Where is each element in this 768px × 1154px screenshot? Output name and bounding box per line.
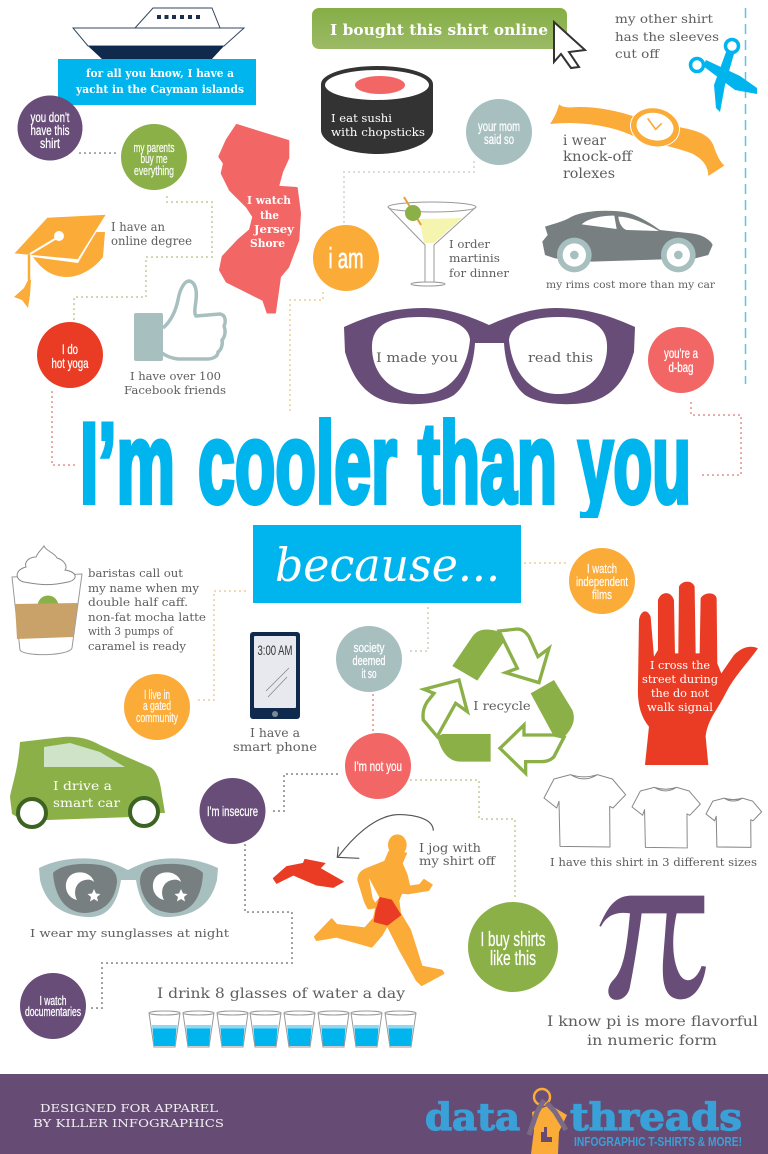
callout: yacht: yacht in the Cayman islands	[75, 82, 244, 96]
circle: i am: i am	[328, 243, 364, 275]
circle: I watch documentaries	[20, 973, 86, 1039]
icon: smart phone	[250, 632, 300, 719]
circle: I watch independent films: I watch	[587, 561, 617, 576]
icon: scissors	[690, 40, 757, 112]
text: Facebook friends: Facebook friends	[124, 383, 226, 397]
text: jog with shirt off: I jog with	[419, 840, 481, 855]
text: baristas: with 3 pumps of	[88, 624, 174, 638]
circle: I buy shirts like this	[468, 902, 558, 992]
text: sleeves cut off: has the sleeves	[615, 29, 719, 44]
text: baristas: non-fat mocha latte	[88, 610, 206, 624]
icon: sunglasses at night	[39, 858, 218, 917]
circle: my parents buy me everything: everything	[134, 164, 174, 178]
circle: society deemed it so: it so	[362, 666, 376, 681]
text: three sizes: I have this shirt in 3 different sizes	[550, 855, 757, 869]
circle: your mom said so: your mom	[478, 119, 520, 134]
text: smart phone: smart phone	[233, 739, 317, 754]
text: baristas: my name when my	[88, 581, 199, 595]
text: online degree: I have an	[111, 220, 165, 234]
title: than	[418, 400, 557, 528]
circle: society deemed it so	[336, 626, 402, 692]
icon: New Jersey state: Jersey	[253, 223, 295, 236]
text: pi	[547, 1014, 758, 1049]
text: online degree: online degree	[111, 234, 192, 248]
icon: eight glasses of water	[149, 1011, 416, 1047]
circle: you don't have this shirt: you don't	[30, 110, 70, 125]
circle: you don't have this shirt	[18, 96, 82, 160]
icon: recycle arrows	[423, 629, 574, 773]
text: baristas	[88, 566, 206, 653]
text: martinis for dinner	[449, 237, 510, 280]
circle: I'm insecure: I'm insecure	[207, 803, 258, 819]
circle: I'm insecure	[200, 778, 266, 844]
footer credit	[33, 1101, 224, 1130]
logo: data threads: data	[425, 1095, 520, 1139]
circle: you don't have this shirt: shirt	[40, 136, 60, 151]
text: knock-off rolexes: i wear	[563, 133, 607, 149]
circle: I live in a gated community	[124, 674, 190, 740]
icon: hand signal: I cross the	[650, 659, 710, 672]
circle: society deemed it so: society	[354, 640, 385, 655]
subtitle: because	[253, 525, 521, 603]
circle: my parents buy me everything: my parents	[134, 141, 174, 155]
icon: hand signal: walk signal	[647, 701, 713, 714]
icon: wristwatch	[550, 103, 724, 176]
callout: yacht	[58, 59, 256, 105]
footer credit: DESIGNED FOR APPAREL	[40, 1101, 218, 1115]
circle: I buy shirts like this: like this	[490, 948, 536, 970]
text: my rims: my rims cost more than my car	[546, 280, 715, 291]
text: 8 glasses: I drink 8 glasses of water a day	[157, 986, 405, 1002]
icon: martini glass	[388, 197, 476, 286]
footer credit: BY KILLER INFOGRAPHICS	[33, 1116, 224, 1130]
circle: you're a d-bag: d-bag	[668, 359, 694, 375]
text: sleeves cut off: cut off	[615, 46, 660, 61]
circle: I watch independent films	[569, 548, 635, 614]
icon: sushi roll: I eat sushi	[331, 111, 392, 125]
icon: smart car: I drive a	[53, 778, 113, 793]
banner: I bought this shirt online	[312, 8, 567, 49]
icon: yacht	[73, 8, 244, 60]
circle: society deemed it so: deemed	[352, 653, 386, 668]
text: smart phone	[233, 725, 317, 754]
circle: I'm not you: I'm not you	[354, 758, 402, 774]
circle: you're a d-bag: you're a	[664, 345, 698, 361]
circle: I watch independent films: independent	[576, 574, 628, 589]
logo: data threads	[425, 1089, 742, 1154]
subtitle: because: because...	[275, 538, 500, 592]
icon: glasses: I made you	[376, 351, 458, 366]
icon: pi symbol	[599, 896, 706, 1000]
circle: I watch independent films: films	[592, 587, 612, 602]
circle: your mom said so	[466, 99, 532, 165]
text: martinis for dinner: for dinner	[449, 266, 510, 280]
callout: yacht: for all you know, I have a	[86, 66, 234, 80]
icon: mouse cursor	[554, 22, 585, 68]
text: Facebook friends: I have over 100	[130, 369, 221, 383]
circle: I live in a gated community: community	[136, 711, 179, 725]
circle: you don't have this shirt: have this	[30, 123, 70, 138]
icon: New Jersey state	[219, 125, 300, 312]
icon: New Jersey state: the	[260, 209, 279, 222]
icon: smart car	[10, 737, 165, 827]
circle: you're a d-bag	[648, 327, 714, 393]
icon: hand signal: street during	[642, 673, 718, 686]
text: jog with shirt off: my shirt off	[419, 853, 496, 868]
title: I’m	[80, 400, 175, 528]
footer band	[0, 1074, 768, 1154]
text: Facebook friends	[124, 369, 226, 397]
circle: I do hot yoga	[37, 322, 103, 388]
icon: smart car: smart car	[53, 795, 120, 810]
icon: jogger throwing shirt	[273, 815, 443, 985]
circle: I watch documentaries: documentaries	[25, 1005, 81, 1019]
icon: thumbs up	[134, 281, 225, 361]
text: sleeves cut off: my other shirt	[615, 11, 713, 26]
circle: i am	[313, 225, 379, 291]
text: knock-off rolexes: knock-off	[563, 149, 634, 165]
logo: data threads: threads	[570, 1095, 742, 1139]
icon: recycle arrows: I recycle	[473, 699, 531, 713]
text: martinis for dinner: martinis	[449, 251, 500, 265]
icon: three t-shirts	[544, 775, 762, 848]
circle: my parents buy me everything	[121, 124, 187, 190]
text: sleeves cut off	[615, 11, 719, 61]
circle: I live in a gated community: I live in	[144, 688, 170, 702]
banner: I bought this shirt online: I bought this shirt online	[330, 21, 548, 39]
text: smart phone: I have a	[250, 725, 301, 740]
icon: smart phone: 3:00 AM	[258, 642, 292, 658]
text: baristas: caramel is ready	[88, 639, 187, 653]
icon: sushi roll: with chopsticks	[331, 125, 425, 139]
circle: I do hot yoga: I do	[62, 341, 78, 357]
text: martinis for dinner: I order	[449, 237, 490, 251]
icon: sushi roll	[321, 66, 433, 154]
text: knock-off rolexes: rolexes	[563, 166, 615, 182]
text: baristas: double half caff.	[88, 595, 188, 609]
text: knock-off rolexes	[563, 133, 634, 182]
text: baristas: baristas call out	[88, 566, 183, 580]
icon: graduation cap	[13, 214, 107, 308]
text: jog with shirt off	[419, 840, 496, 868]
circle: my parents buy me everything: buy me	[140, 152, 168, 166]
icon: hand signal	[638, 582, 758, 765]
circle: I watch documentaries: I watch	[40, 994, 67, 1008]
circle: your mom said so: said so	[484, 132, 514, 147]
title: cooler	[198, 400, 397, 528]
text: pi: I know pi is more flavorful	[547, 1014, 758, 1030]
circle: I live in a gated community: a gated	[143, 699, 171, 713]
text: pi: in numeric form	[587, 1033, 717, 1049]
icon: hand signal: the do not	[651, 687, 710, 700]
icon: glasses	[344, 308, 635, 404]
circle: I buy shirts like this: I buy shirts	[480, 929, 546, 951]
icon: glasses: read this	[528, 351, 593, 366]
icon: sports car	[542, 211, 713, 272]
text: sunglasses: I wear my sunglasses at night	[30, 926, 229, 940]
text: online degree	[111, 220, 192, 248]
circle: I'm not you	[345, 733, 411, 799]
icon: New Jersey state: I watch	[247, 194, 291, 207]
circle: I do hot yoga: hot yoga	[52, 355, 89, 371]
icon: coffee cup	[12, 546, 82, 655]
icon: New Jersey state: Shore	[250, 237, 285, 250]
title	[82, 417, 688, 518]
